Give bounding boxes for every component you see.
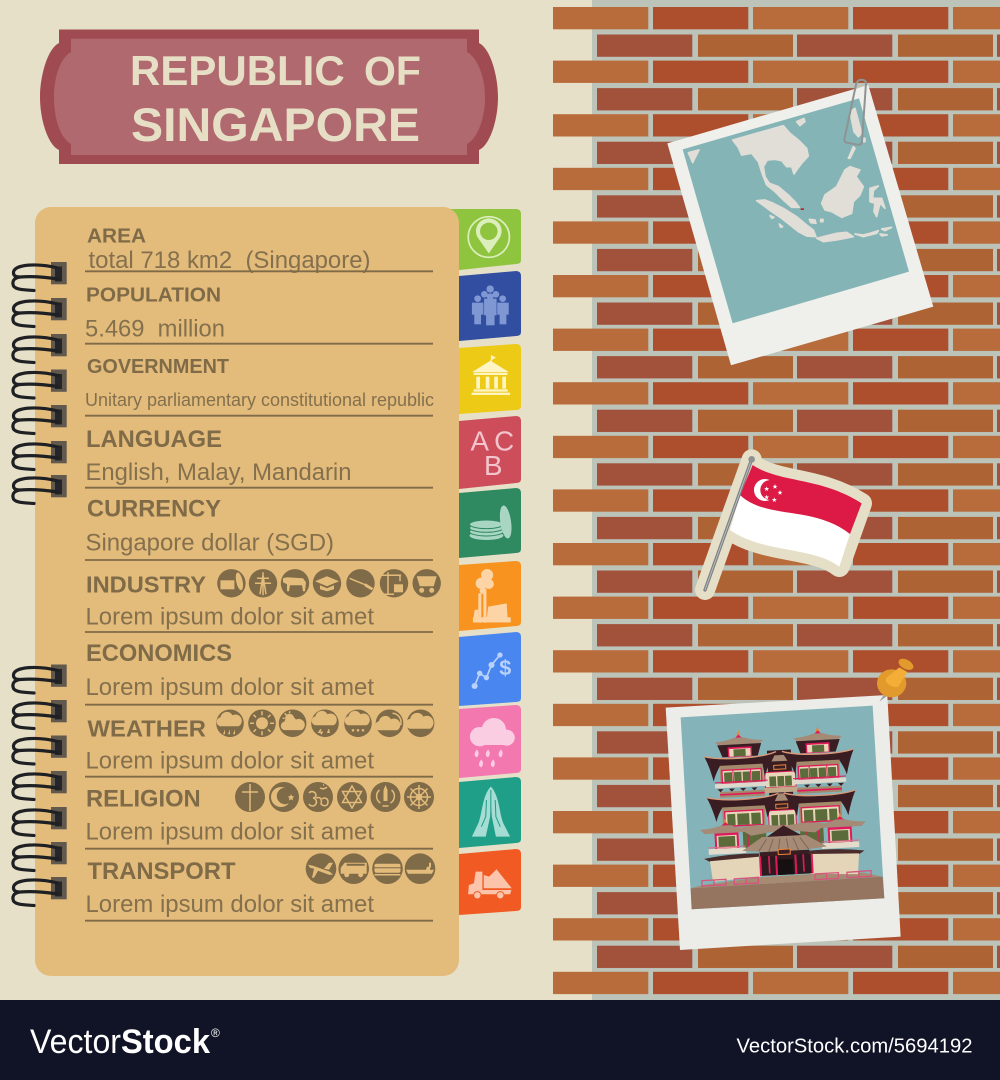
push pin [877, 656, 915, 702]
icon: power pylon [249, 569, 277, 598]
map land [688, 108, 892, 242]
icon: cow [281, 569, 309, 598]
economics section [85, 641, 433, 705]
industry section: Lorem ipsum dolor sit amet [86, 604, 374, 631]
currency section [85, 497, 433, 560]
icon: mining [217, 569, 246, 598]
title plaque [40, 30, 498, 164]
spiral binding upper [13, 262, 67, 504]
religion icons [235, 782, 434, 812]
icon: dharma wheel [404, 782, 434, 812]
icon: train [372, 853, 403, 884]
transport icons [306, 853, 435, 884]
temple photo card [666, 656, 915, 950]
flag pole [705, 459, 752, 590]
language section: English, Malay, Mandarin [86, 459, 352, 486]
tab icons upper [468, 217, 514, 540]
railings [702, 871, 871, 886]
icon: people [472, 285, 509, 325]
vectorstock logo: Vector [30, 1023, 121, 1061]
flag crescent [754, 479, 776, 501]
area section: total 718 km2 (Singapore) [88, 247, 370, 274]
vectorstock logo: ® [211, 1026, 220, 1040]
icon: graduation cap [313, 569, 341, 598]
icon: A C B letters: C [494, 426, 514, 457]
icon: A C B letters: A [471, 426, 490, 457]
icon: crane [380, 569, 408, 598]
icon: rain cloud [470, 718, 515, 767]
brick wall [553, 0, 1000, 1000]
weather icons [216, 710, 434, 737]
icon: A C B letters: B [484, 450, 503, 481]
language section: LANGUAGE [86, 426, 222, 453]
map water [683, 98, 909, 323]
flag red band [740, 465, 862, 534]
photo sky [681, 706, 884, 909]
icon: ship [405, 853, 435, 884]
singapore flag [705, 456, 862, 590]
population section [85, 284, 433, 344]
temple ground [691, 877, 884, 909]
title line 1: REPUBLIC [130, 47, 345, 94]
icon: praying hands [472, 787, 510, 837]
icon: sun and cloud [279, 710, 306, 737]
image id: VectorStock.com/5694192 [736, 1036, 972, 1058]
title line 2: SINGAPORE [131, 98, 420, 151]
flag stars [764, 484, 783, 502]
right wing [778, 723, 868, 878]
icon: mine cart [412, 569, 441, 598]
icon: economy chart [472, 652, 511, 689]
population section: 5.469 million [85, 316, 225, 343]
icon: bus [338, 853, 369, 884]
temple building [695, 723, 868, 882]
icon: factory [473, 569, 511, 623]
government section: GOVERNMENT [87, 356, 229, 378]
front entrance [741, 823, 828, 877]
singapore marker [801, 208, 804, 210]
vectorstock logo: Stock [121, 1023, 210, 1061]
paper clip [844, 80, 866, 145]
currency section: Singapore dollar (SGD) [86, 530, 334, 557]
icon: rain cloud [216, 710, 244, 737]
transport section [85, 858, 433, 921]
vectorstock logo [30, 1023, 220, 1061]
icon: crescent and star [269, 782, 299, 812]
map photo card [667, 80, 933, 365]
economics section: ECONOMICS [86, 641, 232, 667]
weather section [85, 716, 433, 777]
transport section: Lorem ipsum dolor sit amet [86, 891, 374, 918]
central upper tower [762, 749, 800, 827]
government section: Unitary parliamentary constitutional republic [85, 389, 434, 410]
icon: A C B letters [471, 426, 514, 481]
icon: khanda [370, 782, 400, 812]
government section [85, 356, 434, 416]
photo frame [666, 695, 901, 950]
transport section: TRANSPORT [88, 858, 236, 885]
industry section: INDUSTRY [86, 571, 206, 597]
religion section [85, 786, 433, 849]
flag white band [730, 495, 850, 567]
tab icons lower [468, 569, 515, 899]
language section [85, 426, 433, 488]
icon: cloud [406, 710, 434, 737]
photo frame [667, 85, 933, 365]
icon: star of david [337, 782, 367, 812]
population section: POPULATION [86, 284, 221, 307]
industry icons [217, 569, 441, 598]
icon: sun [248, 710, 276, 737]
area section [85, 224, 433, 274]
icon: coins [470, 505, 513, 540]
weather section: Lorem ipsum dolor sit amet [86, 748, 374, 775]
weather section: WEATHER [88, 716, 206, 742]
icon: location pin [468, 217, 509, 257]
icon: economy chart: $ [499, 656, 511, 680]
icon: om symbol [303, 782, 333, 812]
industry section [85, 571, 433, 632]
icon: government building [472, 355, 510, 395]
spiral binding lower [13, 664, 67, 906]
icon: snow cloud [344, 710, 372, 737]
colored index tabs [450, 209, 521, 915]
currency section: CURRENCY [87, 497, 221, 523]
flag sticker outline [705, 459, 862, 590]
area section: AREA [87, 224, 146, 247]
icon: airplane [306, 853, 336, 884]
icon: cloud and moon [375, 710, 403, 737]
religion section: RELIGION [86, 786, 201, 812]
icon: thunder cloud [311, 710, 339, 737]
icon: cross [235, 782, 265, 812]
left wing [695, 728, 785, 882]
economics section: Lorem ipsum dolor sit amet [86, 674, 374, 701]
icon: rifle [346, 569, 375, 598]
icon: dump truck [468, 869, 512, 899]
notebook panel [35, 207, 459, 976]
footer bar [0, 1000, 1000, 1080]
title line 1: OF [364, 48, 421, 94]
religion section: Lorem ipsum dolor sit amet [86, 818, 374, 845]
